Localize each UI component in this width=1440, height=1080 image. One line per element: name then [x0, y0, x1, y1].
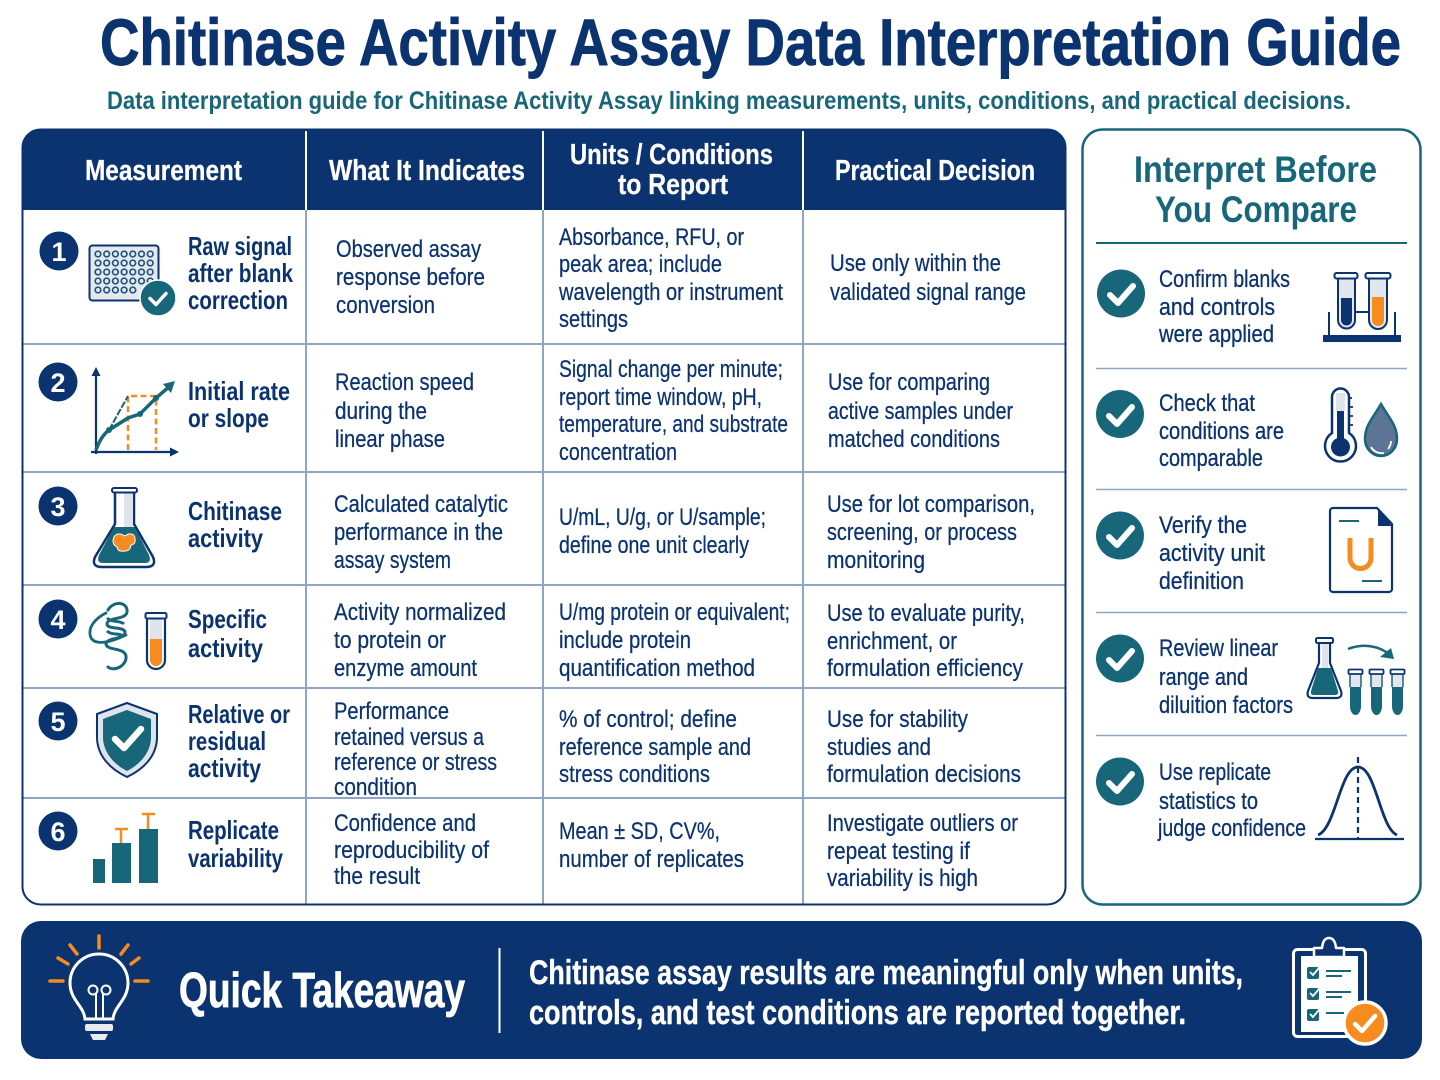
decision: initial rate: [828, 369, 1013, 453]
units: specific activity: U/mg protein or equivalent;: [559, 599, 790, 626]
units: initial rate: Signal change per minute;: [559, 356, 783, 383]
decision: specific activity: formulation efficiency: [827, 655, 1023, 682]
table header: What It Indicates: [329, 155, 525, 187]
label: chitinase activity: [188, 496, 282, 553]
label: chitinase activity: Chitinase: [188, 496, 282, 526]
decision: raw signal: Use only within the: [830, 250, 1001, 277]
takeaway message: Chitinase assay results are meaningful only when units,: [529, 954, 1243, 992]
what it indicates: relative activity: condition: [334, 774, 417, 801]
number badge 2: [38, 362, 78, 402]
what it indicates: chitinase activity: assay system: [334, 547, 451, 574]
item text: and controls: [1159, 294, 1275, 321]
what it indicates: initial rate: during the: [335, 398, 427, 425]
item text: diluition factors: [1159, 692, 1293, 719]
number badge 3: [38, 486, 78, 526]
decision: replicate variability: [827, 810, 1018, 892]
icon: clipboard with check: [1294, 938, 1386, 1044]
panel heading: Interpret Before: [1134, 149, 1377, 190]
what it indicates: replicate variability: the result: [334, 863, 420, 890]
label: initial rate: [188, 376, 290, 433]
number badge 3: 3: [50, 492, 66, 522]
label: replicate variability: [188, 815, 283, 873]
row 1: raw signal: [40, 224, 1026, 333]
check icon: [1097, 270, 1145, 318]
units: raw signal: peak area; include: [559, 251, 722, 278]
label: relative activity: activity: [188, 753, 261, 783]
label: chitinase activity: activity: [188, 523, 263, 553]
label: relative activity: [188, 699, 290, 783]
what it indicates: raw signal: [336, 236, 485, 319]
check icon: [1096, 634, 1144, 682]
item text: Verify the: [1159, 512, 1247, 539]
item text: [1157, 759, 1306, 842]
decision: chitinase activity: monitoring: [827, 547, 925, 574]
label: specific activity: [188, 604, 267, 663]
item: check conditions: [1096, 388, 1397, 472]
row 2: initial rate: [38, 356, 1013, 466]
what it indicates: relative activity: Performance: [334, 698, 449, 725]
decision: chitinase activity: screening, or process: [827, 519, 1017, 546]
number badge 6: 6: [50, 817, 66, 847]
check icon: [1096, 512, 1144, 560]
units: specific activity: [559, 599, 790, 682]
check icon: [1096, 758, 1144, 806]
item: linear range: [1096, 634, 1404, 719]
item text: [1158, 266, 1290, 348]
units: raw signal: [558, 224, 783, 333]
item text: Confirm blanks: [1159, 266, 1290, 293]
item text: were applied: [1158, 321, 1274, 348]
decision: relative activity: formulation decisions: [827, 761, 1021, 788]
decision: initial rate: Use for comparing: [828, 369, 990, 396]
what it indicates: initial rate: linear phase: [335, 426, 445, 453]
item text: Use replicate: [1159, 759, 1271, 786]
decision: specific activity: enrichment, or: [827, 628, 957, 655]
panel: quick takeaway banner: [21, 921, 1422, 1059]
item text: Review linear: [1159, 635, 1278, 662]
number badge 1: 1: [51, 237, 67, 267]
units: relative activity: [559, 706, 751, 788]
what it indicates: initial rate: [335, 369, 474, 453]
row 3: chitinase activity: [38, 486, 1035, 574]
row 6: replicate variability: [38, 810, 1018, 892]
panel: interpret before you compare: [1082, 130, 1420, 904]
icon: shield: [97, 703, 157, 777]
units: specific activity: quantification method: [559, 655, 755, 682]
units: specific activity: include protein: [559, 627, 691, 654]
icon: microplate with check: [90, 246, 176, 316]
what it indicates: relative activity: [334, 698, 497, 801]
what it indicates: specific activity: [334, 599, 506, 682]
table header: [22, 129, 1066, 210]
icon: bell curve: [1315, 757, 1404, 839]
what it indicates: raw signal: conversion: [336, 292, 435, 319]
label: relative activity: Relative or: [188, 699, 290, 729]
units: initial rate: [559, 356, 788, 466]
decision: initial rate: active samples under: [828, 398, 1013, 425]
item text: Check that: [1159, 390, 1255, 417]
decision: specific activity: [827, 600, 1025, 682]
icon: bars with error whiskers: [93, 814, 158, 883]
what it indicates: chitinase activity: Calculated catalytic: [334, 491, 508, 518]
takeaway heading: Quick Takeaway: [179, 964, 465, 1018]
label: initial rate: or slope: [188, 403, 269, 433]
icon: flask and dilution tubes: [1308, 638, 1404, 715]
units: chitinase activity: U/mL, U/g, or U/sample;: [559, 504, 766, 531]
panel heading: [1134, 149, 1377, 230]
units: replicate variability: [559, 818, 744, 873]
what it indicates: relative activity: reference or stress: [334, 749, 497, 776]
what it indicates: replicate variability: Confidence and: [334, 810, 476, 837]
decision: replicate variability: Investigate outliers or: [827, 810, 1018, 837]
decision: specific activity: Use to evaluate purity,: [827, 600, 1025, 627]
table header: Units / Conditions: [570, 139, 773, 171]
what it indicates: specific activity: Activity normalized: [334, 599, 506, 626]
units: replicate variability: number of replicates: [559, 846, 744, 873]
number badge 5: [38, 702, 78, 740]
units: initial rate: report time window, pH,: [559, 384, 762, 411]
decision: relative activity: Use for stability: [827, 706, 968, 733]
units: raw signal: settings: [559, 306, 628, 333]
what it indicates: chitinase activity: performance in the: [334, 519, 503, 546]
item text: definition: [1159, 568, 1244, 595]
item text: activity unit: [1159, 540, 1265, 567]
row 5: relative activity: [38, 698, 1021, 801]
units: raw signal: Absorbance, RFU, or: [559, 224, 744, 251]
icon: document with unit U: [1330, 508, 1392, 592]
what it indicates: specific activity: enzyme amount: [334, 655, 477, 682]
number badge 4: [38, 600, 78, 638]
decision: replicate variability: repeat testing if: [827, 838, 970, 865]
units: relative activity: stress conditions: [559, 761, 710, 788]
decision: relative activity: studies and: [827, 734, 931, 761]
label: specific activity: Specific: [188, 604, 267, 634]
what it indicates: chitinase activity: [334, 491, 508, 574]
table header: Practical Decision: [835, 155, 1035, 187]
units: initial rate: temperature, and substrate: [559, 411, 788, 438]
label: raw signal: Raw signal: [188, 231, 292, 261]
label: relative activity: residual: [188, 726, 266, 756]
what it indicates: initial rate: Reaction speed: [335, 369, 474, 396]
units: relative activity: reference sample and: [559, 734, 751, 761]
label: raw signal: after blank: [188, 258, 293, 288]
table header: to Report: [618, 169, 728, 201]
units: relative activity: % of control; define: [559, 706, 737, 733]
decision: raw signal: [830, 250, 1026, 306]
what it indicates: raw signal: response before: [336, 264, 485, 291]
units: raw signal: wavelength or instrument: [558, 279, 783, 306]
item text: statistics to: [1159, 788, 1258, 815]
item: replicate statistics: [1096, 757, 1404, 842]
check icon: [1096, 390, 1144, 438]
item text: comparable: [1159, 445, 1263, 472]
item text: [1159, 635, 1293, 719]
item: confirm blanks: [1097, 266, 1401, 348]
decision: initial rate: matched conditions: [828, 426, 1000, 453]
icon: protein coil and tube: [90, 603, 166, 669]
decision: replicate variability: variability is high: [827, 865, 978, 892]
what it indicates: specific activity: to protein or: [334, 627, 446, 654]
label: replicate variability: variability: [188, 843, 283, 873]
label: specific activity: activity: [188, 633, 263, 663]
number badge 5: 5: [50, 707, 66, 737]
table header: Measurement: [85, 155, 242, 187]
item text: range and: [1159, 664, 1248, 691]
decision: relative activity: [827, 706, 1021, 788]
item: verify unit: [1096, 508, 1392, 595]
panel: measurement table: [22, 129, 1066, 904]
item text: [1159, 512, 1265, 595]
number badge 4: 4: [50, 605, 66, 635]
units: chitinase activity: [559, 504, 766, 559]
item text: conditions are: [1159, 418, 1284, 445]
icon: rate chart: [91, 367, 179, 456]
what it indicates: relative activity: retained versus a: [334, 724, 485, 751]
decision: raw signal: validated signal range: [830, 279, 1026, 306]
icon: test tubes in rack: [1323, 273, 1401, 342]
label: initial rate: Initial rate: [188, 376, 290, 406]
number badge 6: [38, 812, 78, 850]
item text: judge confidence: [1157, 815, 1306, 842]
what it indicates: replicate variability: reproducibility of: [334, 837, 489, 864]
number badge 2: 2: [50, 368, 66, 398]
icon: thermometer and drop: [1325, 388, 1397, 461]
label: raw signal: correction: [188, 285, 288, 315]
what it indicates: raw signal: Observed assay: [336, 236, 481, 263]
units: chitinase activity: define one unit clearly: [559, 532, 749, 559]
icon: light bulb: [50, 936, 148, 1040]
number badge 1: [40, 232, 78, 270]
icon: flask: [94, 488, 154, 567]
units: initial rate: concentration: [559, 439, 677, 466]
units: replicate variability: Mean ± SD, CV%,: [559, 818, 720, 845]
decision: chitinase activity: Use for lot comparison,: [827, 491, 1035, 518]
label: raw signal: [188, 231, 293, 315]
label: replicate variability: Replicate: [188, 815, 279, 845]
item text: [1159, 390, 1284, 472]
row 4: specific activity: [38, 599, 1025, 682]
what it indicates: replicate variability: [334, 810, 489, 890]
decision: chitinase activity: [827, 491, 1035, 574]
panel heading: You Compare: [1155, 189, 1357, 230]
takeaway message: [529, 954, 1243, 1032]
takeaway message: controls, and test conditions are reported together.: [529, 994, 1186, 1032]
